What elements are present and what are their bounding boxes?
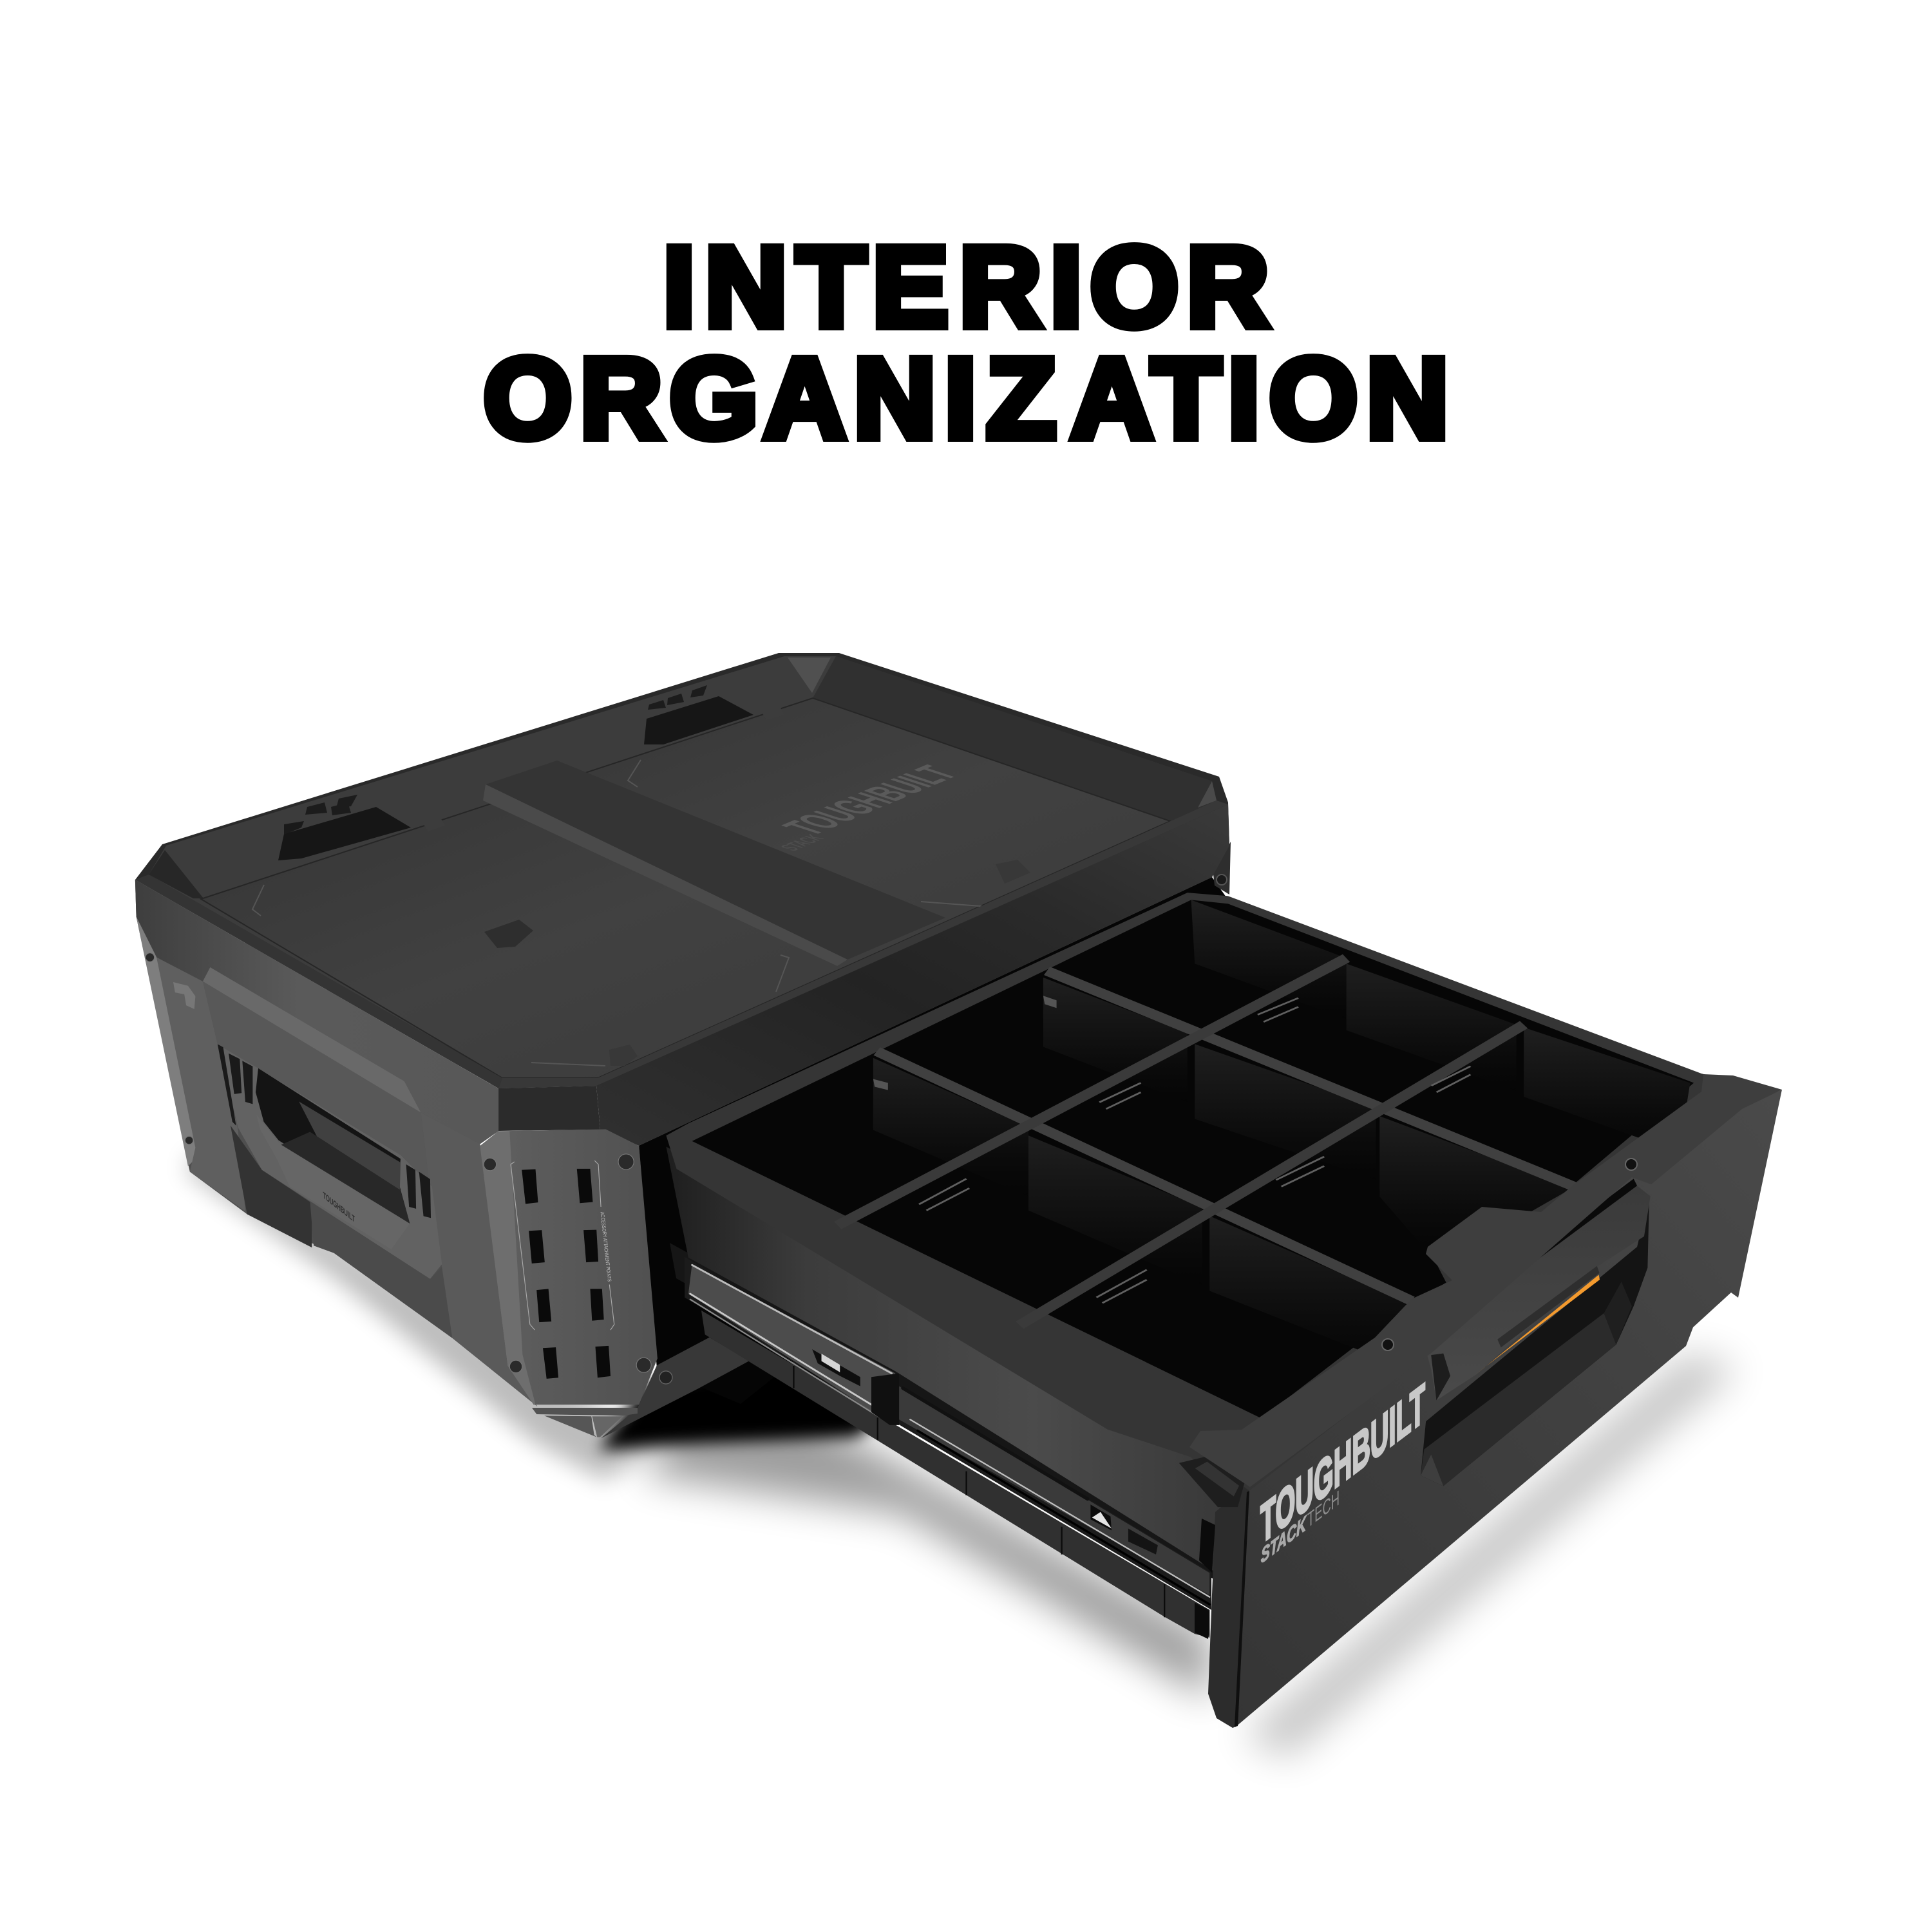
rail highlights	[690, 1265, 1209, 1604]
drawer front	[1179, 1074, 1782, 1728]
corner facets	[149, 658, 1217, 898]
handle opening	[256, 1068, 410, 1224]
tray rim	[666, 893, 1746, 1513]
rail rear section	[899, 1387, 1209, 1595]
divider slot marks	[919, 998, 1470, 1303]
left side of the case	[135, 880, 658, 1406]
orange pull strip	[1475, 1274, 1600, 1376]
attachment text: ACCESSORY ATTACHMENT POINTS	[600, 1211, 612, 1282]
flap end tab	[1431, 1353, 1450, 1401]
lower right panel	[310, 1201, 452, 1338]
drawer front panel	[1235, 1090, 1782, 1727]
drawer tail end	[1195, 1519, 1215, 1639]
divider tabs	[873, 996, 1057, 1090]
panel edge line	[1235, 1491, 1249, 1727]
lid floor	[201, 698, 1170, 1078]
left column	[156, 958, 245, 1211]
left column logo	[173, 982, 195, 1009]
recess corner facets	[1421, 1455, 1443, 1486]
side silhouette	[135, 880, 537, 1406]
lid TOUGHBUILT logo: STACK	[776, 833, 829, 853]
storage case body	[135, 653, 1231, 1404]
title: INTERIOR	[663, 224, 1269, 350]
tray side	[666, 1146, 1232, 1571]
rail window	[812, 1349, 860, 1387]
lid front corner	[498, 1086, 600, 1131]
under rail blocks	[701, 1311, 1209, 1638]
floor center beam	[483, 761, 945, 966]
flap top slit	[1423, 1179, 1637, 1341]
handle grip	[256, 1114, 410, 1249]
lid back wall	[149, 656, 1217, 1078]
rail clip	[871, 1373, 899, 1425]
handle brand text: TOUGHBUILT	[323, 1190, 355, 1225]
slot field brackets	[511, 1160, 614, 1330]
compartment dividers	[838, 958, 1574, 1325]
upper band	[135, 880, 498, 1144]
right latch recess	[644, 685, 784, 744]
recess lower bevel	[1421, 1313, 1616, 1486]
small stop tab	[609, 1045, 638, 1066]
rail direction arrow	[1090, 1504, 1158, 1555]
left latch recess	[278, 795, 445, 860]
rim top face	[498, 800, 1228, 1088]
lid front rim	[596, 804, 1229, 1146]
black recess under the lid	[639, 877, 1229, 1404]
front panel logo: STACK	[1261, 1510, 1307, 1568]
recess back	[1421, 1195, 1649, 1486]
drawer handle	[1421, 1179, 1651, 1486]
lid silhouette	[135, 653, 1229, 1146]
light edge strip	[137, 916, 199, 1166]
drawer front: TOUGHBUILT	[1260, 1372, 1425, 1557]
rail front section	[688, 1264, 895, 1423]
flap ledge	[1497, 1266, 1600, 1347]
small stop tab rear	[996, 860, 1030, 884]
drawer latch clip	[1179, 1456, 1244, 1507]
handle top bar	[203, 967, 421, 1113]
rail bar	[685, 1257, 1211, 1610]
attachment slots	[522, 1169, 611, 1379]
drawer top band	[1189, 1074, 1782, 1487]
drawer tray	[666, 893, 1746, 1571]
screws	[146, 953, 651, 1373]
panel above handle	[203, 981, 432, 1207]
floor bracket marks	[252, 760, 1005, 1066]
title	[484, 224, 1448, 462]
front left column	[421, 1113, 537, 1406]
lid TOUGHBUILT logo: TOUGHBUILT	[772, 761, 969, 839]
handle flap	[1423, 1186, 1651, 1401]
dark lower block	[231, 1126, 312, 1247]
front panel logo: TECH	[1307, 1485, 1340, 1533]
handle surround	[219, 1045, 442, 1279]
rear right corner bracket	[1213, 842, 1231, 895]
title: ORGANIZATION	[484, 336, 1448, 462]
front panel logo	[1260, 1372, 1425, 1568]
tray interior	[692, 900, 1694, 1418]
case base wedge	[532, 1338, 749, 1438]
lid right wall	[813, 656, 1217, 821]
floor shadows	[187, 1153, 1739, 1758]
drawer rail	[685, 1257, 1211, 1638]
opening inner wall	[299, 1101, 401, 1190]
floor logo mark	[484, 920, 533, 948]
band screws	[1382, 1159, 1637, 1350]
attachment panel	[480, 1129, 658, 1405]
compartment walls	[873, 900, 1690, 1368]
rim left top face	[135, 875, 502, 1088]
panel side edge	[1208, 1487, 1249, 1728]
handle clips	[218, 1044, 431, 1218]
drawer rail backing	[670, 1243, 1224, 1581]
